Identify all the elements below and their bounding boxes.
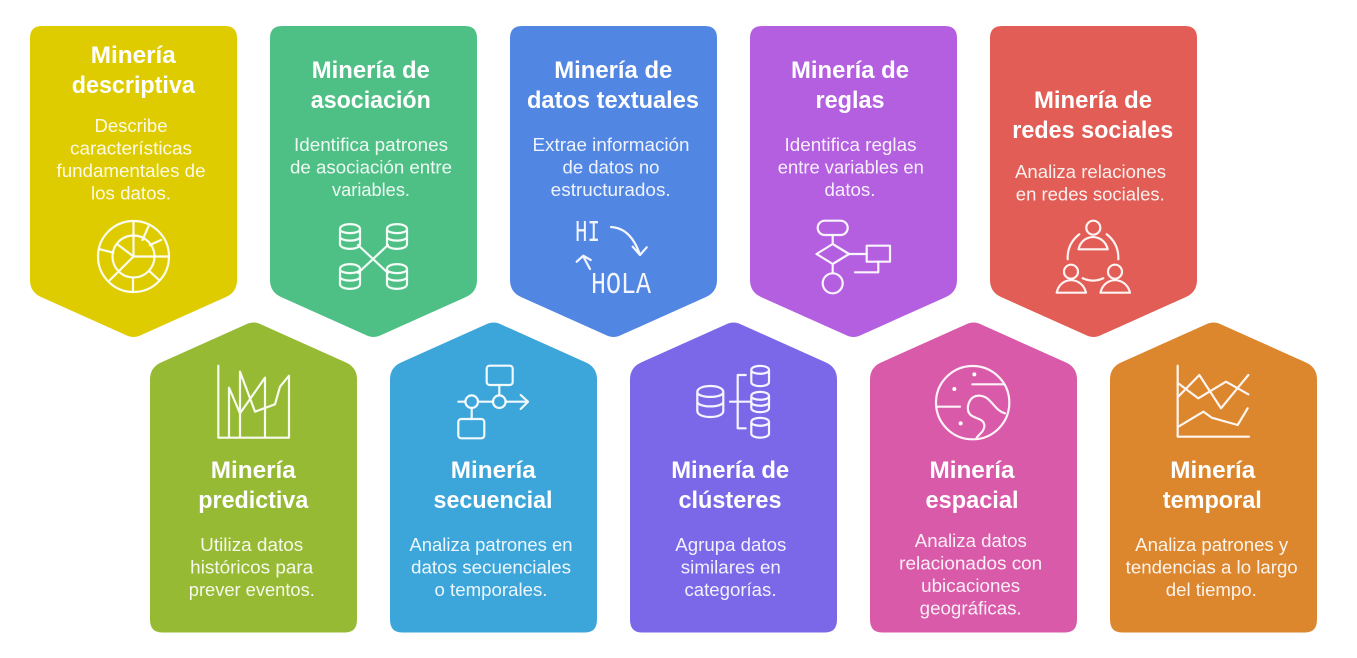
panel: minería secuencial [390,322,597,632]
panel shape [870,322,1077,632]
icon: translation HI to HOLA [575,216,651,303]
heading: secuencial [434,487,552,514]
heading [926,457,1018,514]
panel shape [150,322,357,632]
description: variables. [332,179,410,200]
heading: temporal [1163,487,1262,514]
icon: globe map [936,366,1009,439]
description [532,134,690,200]
heading: clústeres [678,487,782,514]
panel shape [270,26,477,337]
panel shape [990,26,1197,337]
heading [1012,87,1173,144]
description: de asociación entre [290,156,452,178]
heading: Minería [211,457,296,484]
description: entre variables en [778,156,924,178]
description: similares en [681,556,781,578]
description: Analiza patrones y [1135,534,1289,555]
panel: minería de asociación [270,26,477,337]
icon: clustered databases [697,366,769,438]
description: características [70,138,192,158]
description: ubicaciones [921,575,1020,596]
panel: minería de clústeres [630,322,837,632]
description: fundamentales de [56,160,206,181]
description [675,534,786,600]
description [1126,534,1298,600]
icon: segmented pie chart [98,221,169,292]
heading: Minería [930,457,1015,484]
description: prever eventos. [189,579,315,600]
description: categorías. [684,579,776,600]
description: Extrae información [532,134,690,155]
description [778,134,924,200]
description [899,530,1042,618]
heading [72,42,195,99]
icon: social network people [1057,221,1130,293]
panel shape [390,322,597,632]
description: de datos no [562,156,660,178]
panel shape [510,26,717,337]
heading: Minería [451,457,536,484]
description: geográficas. [920,598,1022,618]
description: datos secuenciales [411,556,571,578]
icon: time series line chart [1178,366,1249,437]
panel: minería temporal [1110,322,1317,632]
heading: redes sociales [1012,117,1173,144]
description: del tiempo. [1166,579,1257,600]
description: Utiliza datos [200,534,303,555]
heading: Minería de [554,57,672,84]
icon: translation HI to HOLA: HI [575,216,600,251]
heading [198,457,309,514]
description: en redes sociales. [1016,184,1165,204]
panel shape [630,322,837,632]
description: Analiza patrones en [410,534,572,555]
description: Agrupa datos [675,534,786,555]
heading [311,57,431,114]
description: históricos para [190,556,314,578]
heading [671,457,789,514]
description: los datos. [91,182,171,204]
panel: minería descriptiva [30,26,237,337]
heading: asociación [311,87,431,114]
panel shape [750,26,957,337]
panel shape [1110,322,1317,632]
description: relacionados con [899,552,1042,574]
icon: area line chart [218,366,289,438]
panel: minería de redes sociales [990,26,1197,337]
icon: sequence diagram [458,366,528,438]
heading: descriptiva [72,72,195,99]
description: Describe [94,115,168,136]
heading: Minería de [312,57,430,84]
heading: espacial [926,487,1018,514]
heading: Minería de [671,457,789,484]
description: tendencias a lo largo [1126,556,1298,578]
description: Identifica patrones [294,134,448,155]
description: datos. [824,179,876,200]
icon: translation HI to HOLA: HOLA [591,268,651,303]
description [56,115,206,204]
heading: reglas [816,87,884,114]
heading [791,57,909,114]
panel: minería predictiva [150,322,357,632]
description: Identifica reglas [784,134,916,155]
description: estructurados. [551,179,671,200]
heading: Minería de [791,57,909,84]
heading: Minería [91,42,176,69]
description: o temporales. [434,579,548,600]
heading: predictiva [198,487,309,514]
icon: flowchart [816,221,890,293]
heading [1163,457,1262,514]
description [189,534,315,600]
description [1015,161,1166,204]
panel: minería de reglas [750,26,957,337]
icon: connected databases [340,224,407,289]
panel: minería de datos textuales [510,26,717,337]
heading: Minería de [1034,87,1152,114]
heading [434,457,552,514]
description: Analiza relaciones [1015,161,1166,182]
description [290,134,452,200]
panel: minería espacial [870,322,1077,632]
description: Analiza datos [915,530,1027,551]
heading: Minería [1170,457,1256,484]
heading [527,57,699,114]
heading: datos textuales [527,87,699,114]
panel shape [30,26,237,337]
description [410,534,572,600]
